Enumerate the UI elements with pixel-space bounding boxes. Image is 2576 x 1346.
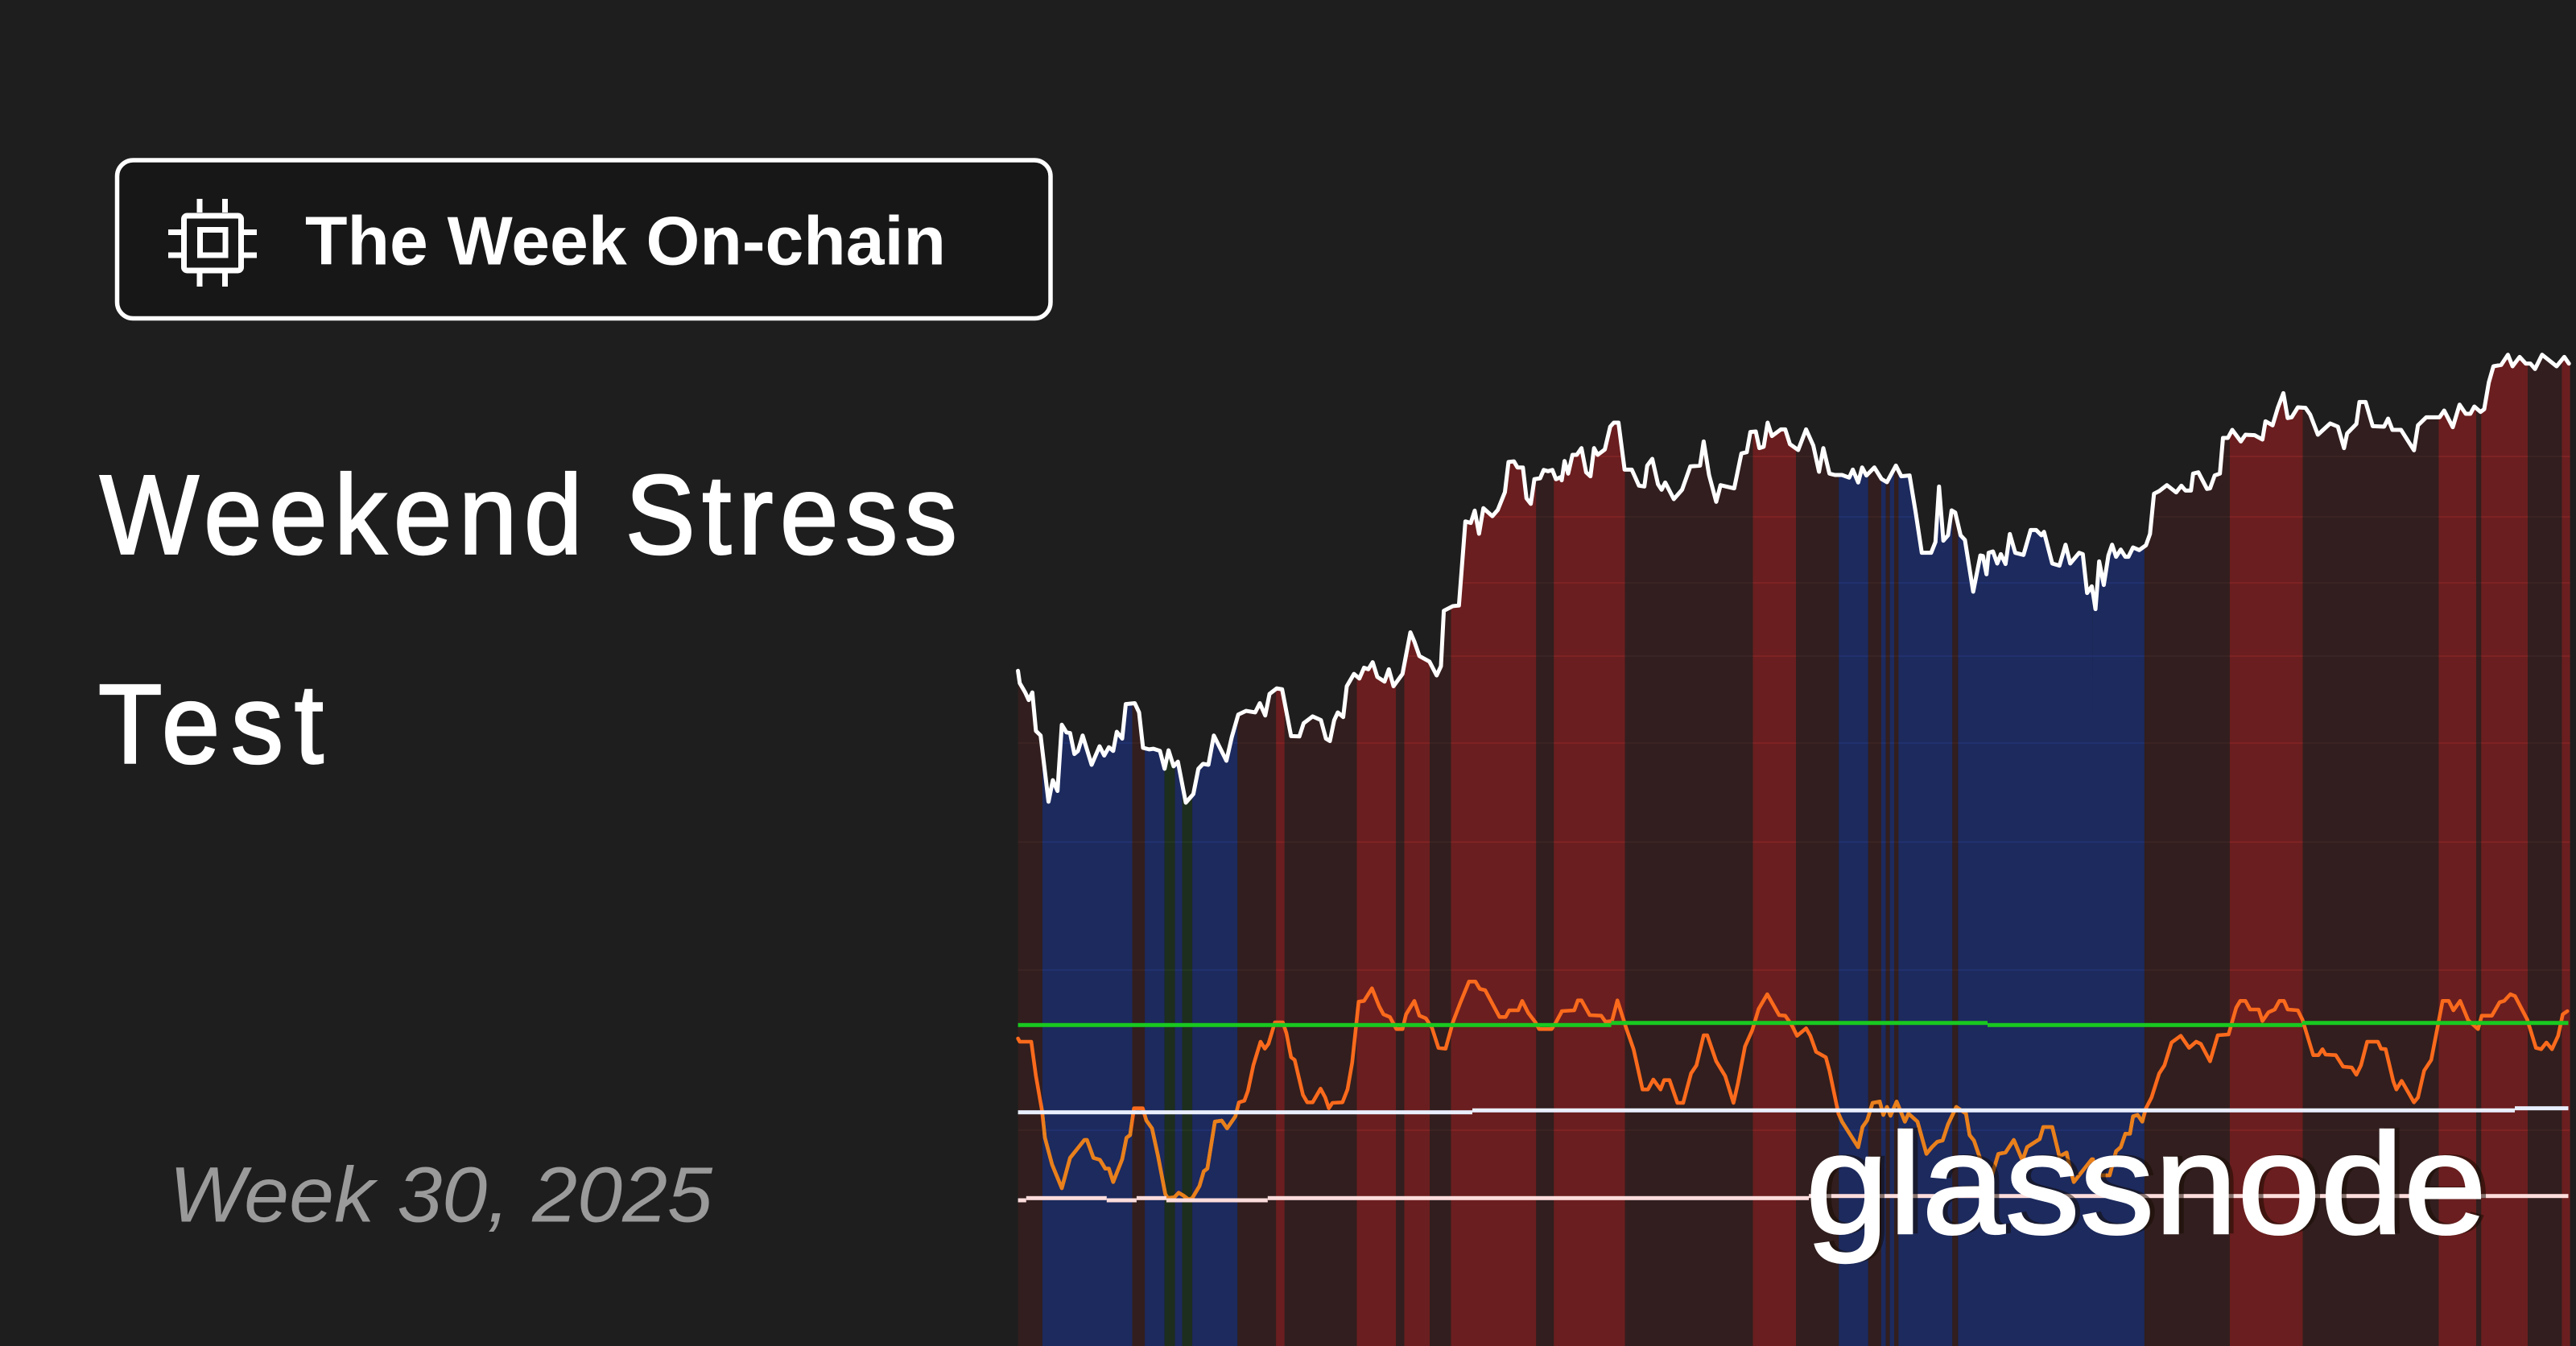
badge: The Week On-chain <box>118 160 1051 319</box>
title line 2: Test <box>98 661 324 787</box>
price line <box>1018 355 2569 803</box>
badge frame <box>118 160 1051 319</box>
title <box>98 452 957 787</box>
panel: chart <box>1018 322 2571 1346</box>
green upper threshold line <box>1018 1021 2568 1027</box>
orange oscillator line <box>1018 981 2567 1199</box>
title line 1: Weekend Stress <box>100 452 957 578</box>
icon: microchip <box>168 199 257 287</box>
logo: glassnode wordmark: glassnode <box>1806 1104 2487 1264</box>
date label: Week 30, 2025 <box>169 1150 713 1238</box>
regime bands under the price curve <box>1018 322 2571 1346</box>
white middle threshold line <box>1018 1106 2568 1114</box>
pale lower threshold line <box>1018 1194 2568 1203</box>
badge label: The Week On-chain <box>305 204 946 280</box>
